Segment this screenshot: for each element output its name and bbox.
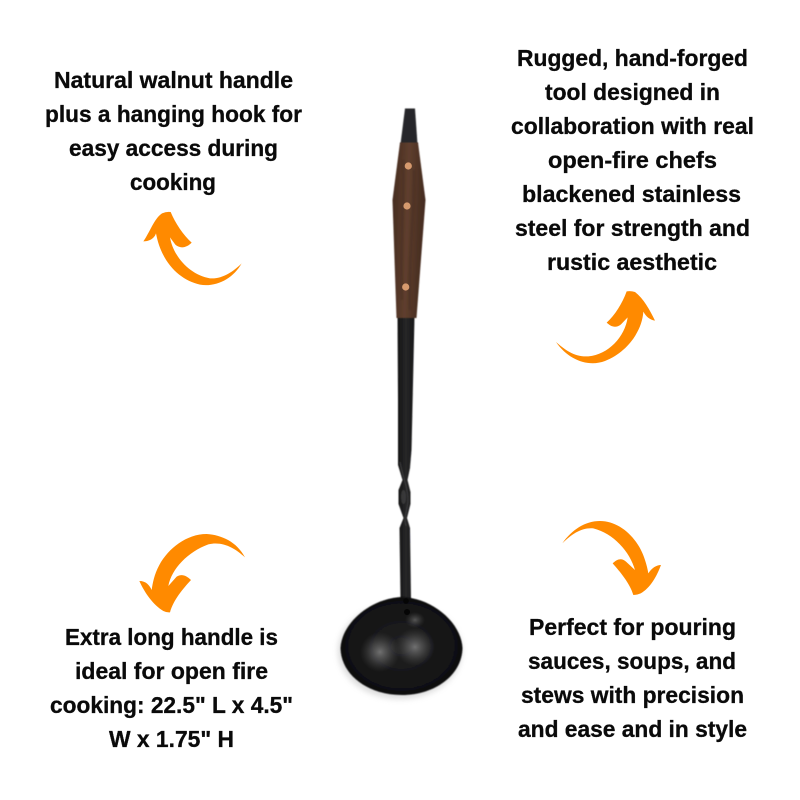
- text: walnut handle feature: easy access during: [69, 135, 278, 161]
- text: walnut handle feature: plus a hanging hook for: [45, 101, 302, 127]
- text: rugged hand-forged feature: tool designed in: [545, 79, 720, 105]
- text: pouring feature: [518, 614, 747, 742]
- text: extra long handle feature: Extra long handle is: [65, 624, 278, 650]
- text: rugged hand-forged feature: Rugged, hand-forged: [517, 45, 748, 71]
- text: walnut handle feature: cooking: [130, 169, 216, 195]
- copper rivets: [405, 162, 412, 170]
- text: walnut handle feature: Natural walnut handle: [54, 67, 293, 93]
- text: rugged hand-forged feature: collaboration with real: [511, 113, 754, 139]
- hanging hook tip: [400, 108, 418, 144]
- soft ladle shadow: [338, 603, 462, 699]
- text: rugged hand-forged feature: [511, 45, 754, 275]
- steel shaft with twist: [398, 316, 414, 600]
- text: rugged hand-forged feature: rustic aesthetic: [547, 249, 717, 275]
- text: walnut handle feature: [45, 67, 302, 195]
- text: rugged hand-forged feature: blackened stainless: [522, 181, 741, 207]
- text: pouring feature: and ease and in style: [518, 716, 747, 742]
- text: extra long handle feature: W x 1.75" H: [109, 726, 234, 752]
- walnut handle: [392, 142, 426, 318]
- text: rugged hand-forged feature: open-fire chefs: [548, 147, 717, 173]
- arrow: bottom left pointing down to dimensions text: [139, 534, 245, 612]
- text: pouring feature: sauces, soups, and: [528, 648, 736, 674]
- arrow: top right pointing up to forged text: [556, 291, 655, 363]
- text: pouring feature: Perfect for pouring: [529, 614, 736, 640]
- arrow: top left pointing up to handle text: [143, 212, 242, 285]
- text: rugged hand-forged feature: steel for strength and: [515, 215, 750, 241]
- text: extra long handle feature: [50, 624, 293, 752]
- ladle bowl: [340, 597, 462, 695]
- text: extra long handle feature: ideal for open fire: [75, 658, 268, 684]
- arrow: bottom right pointing down to pouring text: [562, 521, 661, 595]
- text: pouring feature: stews with precision: [521, 682, 744, 708]
- ladle product photo: [338, 108, 462, 699]
- text: extra long handle feature: cooking: 22.5" L x 4.5": [50, 692, 293, 718]
